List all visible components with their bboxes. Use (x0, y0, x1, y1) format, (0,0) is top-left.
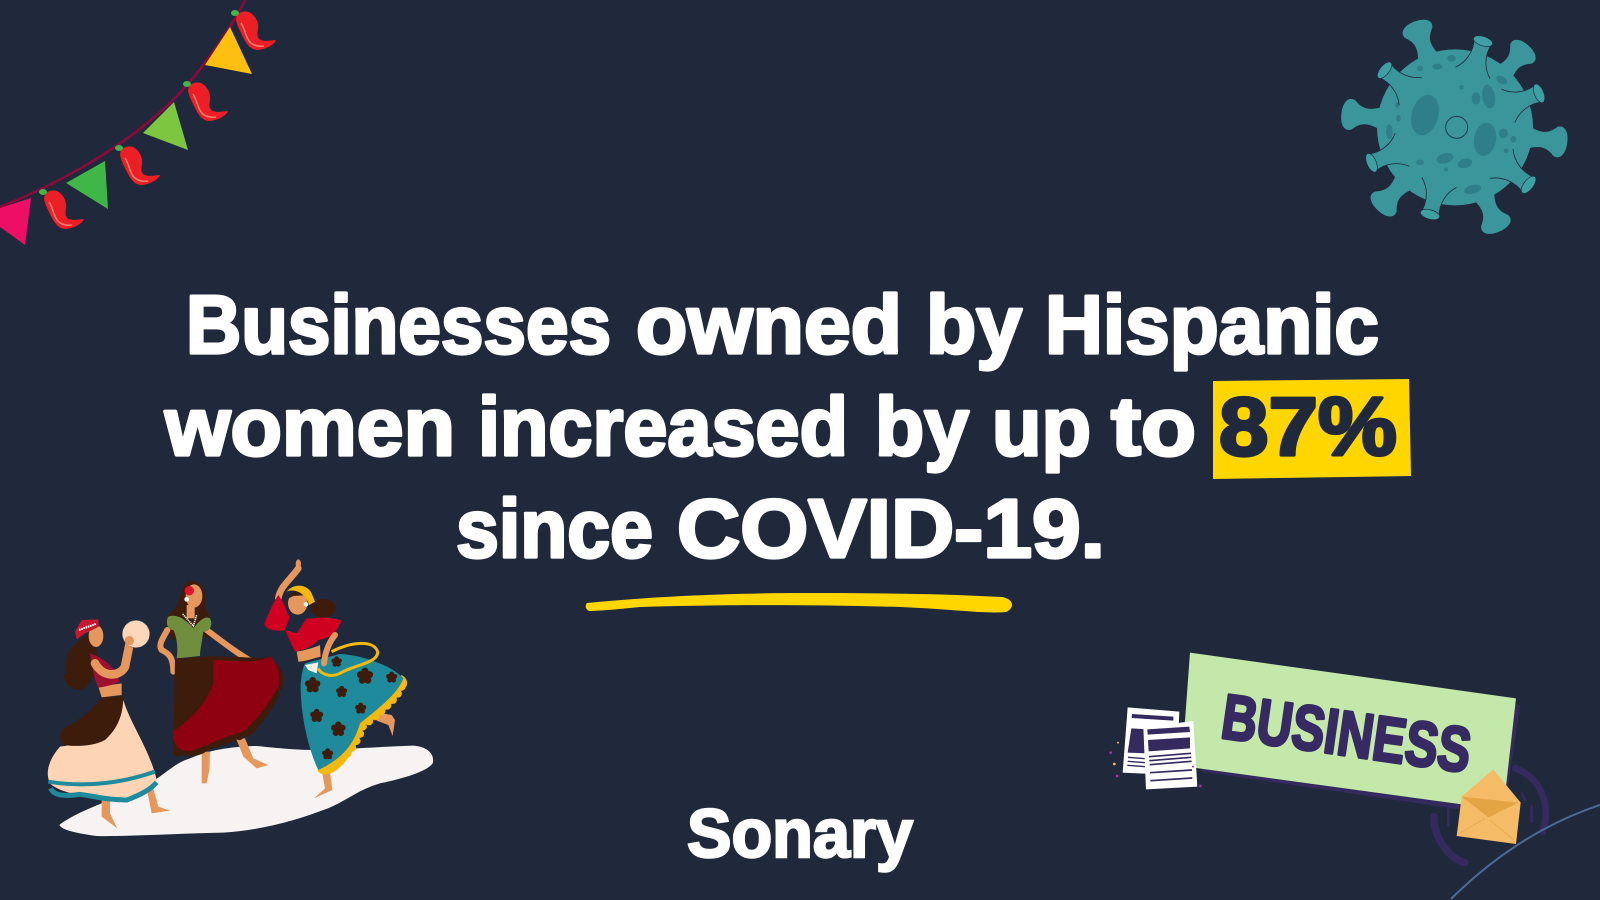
headline line 1 (186, 278, 1379, 371)
headline line 3: since (456, 482, 653, 575)
decorative blue arc (1451, 805, 1600, 899)
highlighted figure 87%: 87% (1219, 380, 1397, 473)
headline line 1: owned (636, 278, 902, 371)
envelope (1457, 769, 1521, 844)
headline line 3 (456, 482, 1105, 575)
illustration: three dancers (48, 559, 433, 836)
headline line 1: Hispanic (1045, 278, 1379, 371)
headline line 3: COVID-19. (677, 482, 1105, 575)
headline line 2: increased (478, 380, 848, 473)
dancer with tambourine (48, 619, 170, 828)
sign shadow (1190, 660, 1520, 813)
headline line 1: Businesses (186, 278, 611, 371)
dancer in red skirt (160, 581, 283, 783)
headline line 1: by (926, 278, 1022, 371)
logo: Sonary: Sonary (687, 795, 913, 872)
headline line 2: women (164, 380, 455, 473)
headline (164, 278, 1411, 575)
headline line 2: by (875, 380, 969, 473)
yellow brush underline (586, 593, 1012, 612)
icon: bunting with chili peppers (0, 0, 276, 245)
sign label: BUSINESS (1217, 682, 1475, 787)
headline line 2: to (1111, 380, 1196, 473)
green sign (1182, 653, 1516, 810)
newspapers (1109, 707, 1202, 789)
highlight box behind 87% (1213, 379, 1411, 479)
icon: coronavirus (1339, 16, 1569, 238)
white floor blob (59, 746, 433, 836)
headline line 2: up (992, 380, 1091, 473)
dancer in teal skirt (264, 559, 407, 798)
swirl behind envelope (1434, 768, 1546, 863)
icon: business sign with papers and envelope (1109, 653, 1546, 863)
headline line 2 (164, 380, 1196, 473)
